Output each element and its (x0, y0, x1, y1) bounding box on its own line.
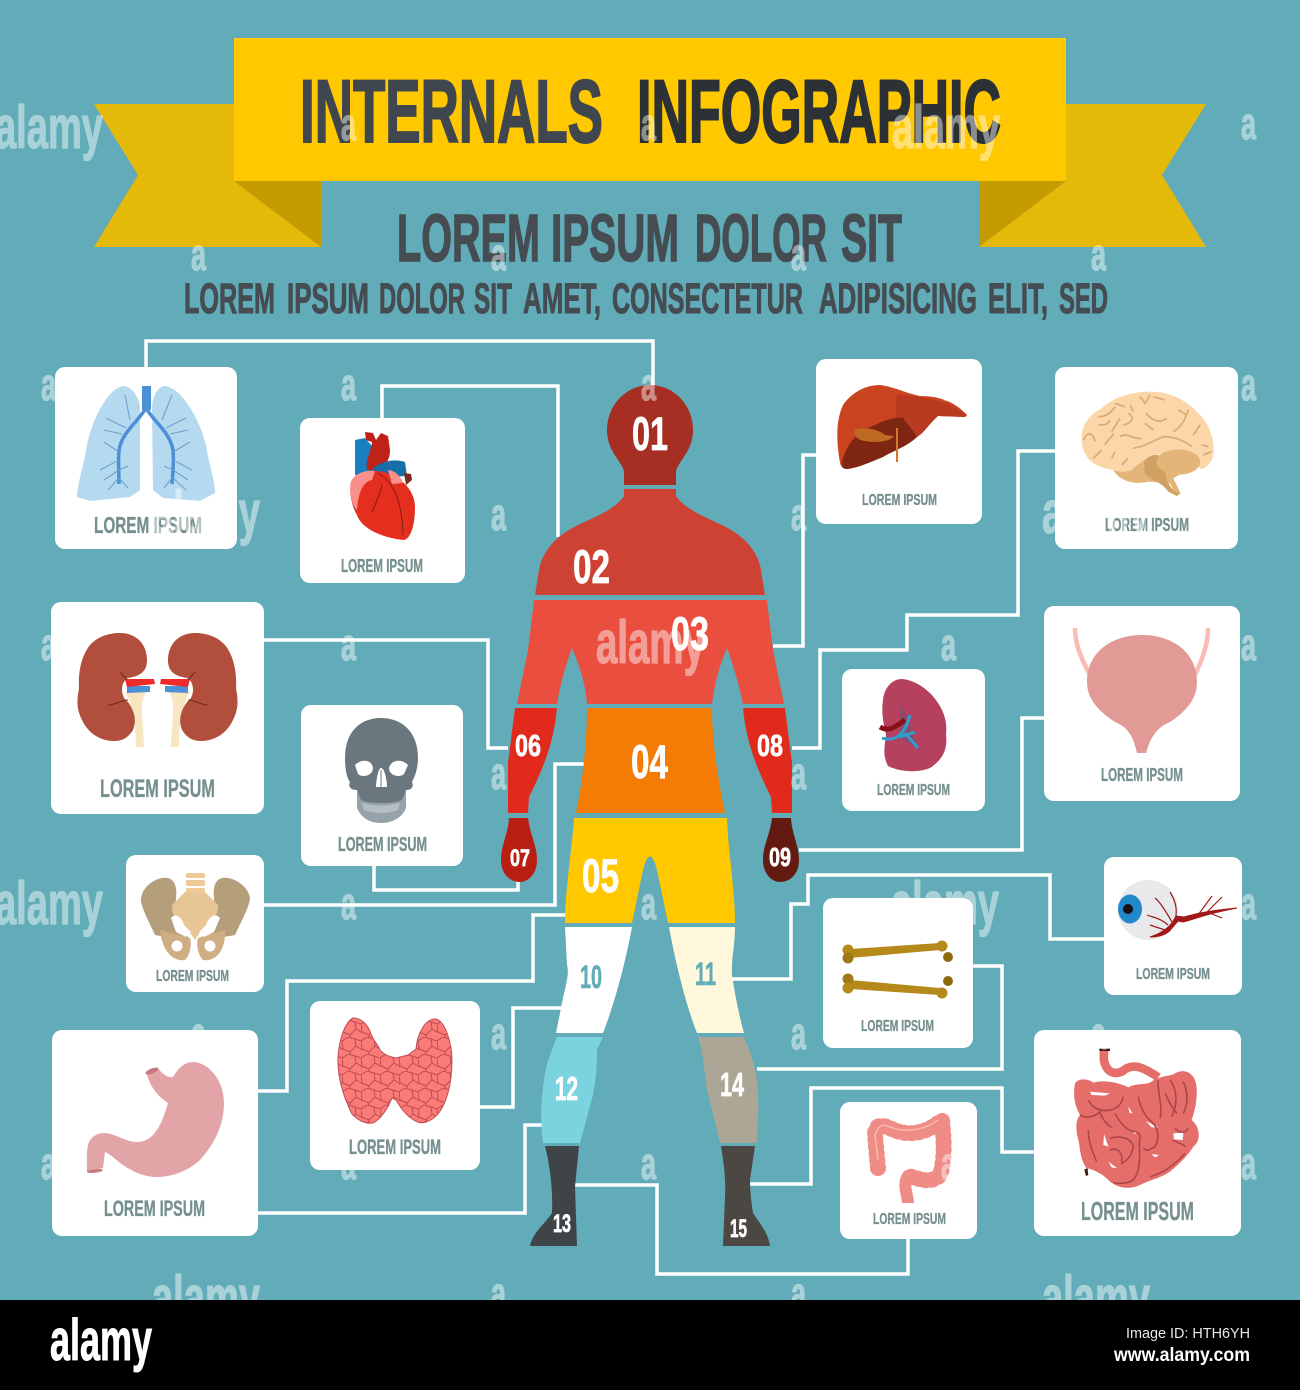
body 06 left forearm (508, 708, 557, 813)
watermarks: alamy (0, 94, 103, 161)
label: LOREM IPSUM (94, 512, 202, 538)
heading: LOREM (397, 201, 540, 276)
watermarks: a (641, 359, 657, 410)
watermarks: alamy (152, 479, 260, 546)
watermarks: a (341, 619, 357, 670)
subheading: LOREM (184, 275, 275, 323)
panel: eye (1104, 857, 1242, 995)
watermarks: a (191, 229, 207, 280)
watermarks: a (1241, 359, 1257, 410)
body 13 left foot (530, 1146, 579, 1246)
subheading: ADIPISICING (819, 275, 977, 323)
body 11 right thigh: 11 (695, 956, 716, 992)
watermarks: a (791, 1008, 807, 1059)
subheading: SED (1059, 275, 1108, 323)
label: LOREM IPSUM (1081, 1196, 1194, 1226)
watermarks: a (1091, 229, 1107, 280)
body 08 right forearm: 08 (757, 728, 783, 763)
body 07 left hand (501, 818, 537, 882)
watermarks: a (641, 878, 657, 929)
body 10 left thigh (556, 927, 632, 1033)
body 05 hips: 05 (582, 849, 619, 902)
watermarks: a (1241, 619, 1257, 670)
watermarks: a (491, 748, 507, 799)
subheading: IPSUM (287, 275, 369, 323)
body 13 left foot: 13 (553, 1210, 571, 1238)
title: INTERNALS (300, 61, 603, 161)
watermarks: a (941, 619, 957, 670)
body 12 left calf: 12 (555, 1070, 578, 1107)
body 02 shoulders: 02 (573, 540, 610, 593)
panel: lungs (55, 367, 237, 549)
watermarks: a (641, 1138, 657, 1189)
label: LOREM IPSUM (877, 782, 950, 799)
subheading: CONSECTETUR (612, 275, 803, 323)
icon: colon (875, 1120, 944, 1203)
footer logo: alamy (50, 1308, 152, 1373)
panel: kidneys (51, 602, 264, 814)
watermarks: alamy (891, 870, 999, 937)
subheading: ELIT, (988, 275, 1048, 323)
icon: heart (350, 432, 415, 540)
website: www.alamy.com (1113, 1345, 1250, 1366)
image id: Image ID: HTH6YH (1126, 1325, 1250, 1342)
heading: SIT (841, 201, 902, 276)
body 14 right calf (698, 1037, 758, 1143)
panel: heart (300, 418, 465, 583)
icon: brain (1082, 392, 1214, 496)
panel: intestine (1034, 1030, 1241, 1236)
title ribbon (94, 38, 1206, 247)
body 10 left thigh: 10 (580, 959, 602, 995)
watermarks: alamy (1042, 1264, 1150, 1331)
watermarks: a (41, 619, 57, 670)
label: LOREM IPSUM (156, 968, 229, 985)
body 09 right hand (763, 818, 799, 882)
body 01 head: 01 (632, 407, 668, 460)
watermarks: a (1091, 1008, 1107, 1059)
watermarks: a (791, 748, 807, 799)
watermarks: a (1241, 1138, 1257, 1189)
watermarks: a (341, 99, 357, 150)
panel: colon (840, 1102, 977, 1239)
heading: DOLOR (695, 201, 827, 276)
label: LOREM IPSUM (873, 1211, 946, 1228)
icon: lungs (77, 386, 215, 501)
watermarks: a (641, 99, 657, 150)
body 04 abdomen (576, 708, 725, 813)
label: LOREM IPSUM (861, 1018, 934, 1035)
watermarks: alamy (0, 870, 103, 937)
label: LOREM IPSUM (341, 556, 423, 576)
subheading (184, 275, 1108, 323)
body 03 chest (517, 600, 784, 704)
body 07 left hand: 07 (510, 845, 530, 872)
label: LOREM IPSUM (100, 775, 215, 803)
watermarks: a (341, 1138, 357, 1189)
icon: bladder (1075, 628, 1208, 753)
panel: skull (301, 705, 463, 866)
label: LOREM IPSUM (349, 1136, 441, 1159)
human body figure (501, 385, 799, 1246)
watermarks: a (791, 229, 807, 280)
watermarks: a (791, 1268, 807, 1319)
body 05 hips (565, 818, 735, 923)
icon: bones (842, 940, 953, 998)
label: LOREM IPSUM (1101, 765, 1183, 785)
body 03 chest: 03 (671, 607, 709, 660)
subheading: AMET, (523, 275, 601, 323)
panel: spleen (842, 669, 985, 811)
panel: thyroid (310, 1001, 480, 1170)
panel: pelvis (126, 855, 264, 992)
icon: skull (345, 718, 418, 823)
icon: eye (1118, 880, 1237, 940)
watermarks: a (941, 359, 957, 410)
body 06 left forearm: 06 (515, 728, 541, 763)
watermarks: a (1241, 878, 1257, 929)
watermarks: a (491, 489, 507, 540)
label: LOREM IPSUM (1136, 966, 1210, 983)
heading: IPSUM (551, 201, 679, 276)
body 14 right calf: 14 (720, 1066, 744, 1103)
body 04 abdomen: 04 (631, 735, 668, 788)
label: LOREM IPSUM (862, 492, 937, 509)
icon: liver (837, 385, 967, 469)
watermarks: alamy (1042, 479, 1150, 546)
watermarks: a (1241, 98, 1257, 149)
panel: stomach (52, 1030, 258, 1236)
watermarks: a (341, 878, 357, 929)
panel: bones (823, 898, 973, 1048)
icon: spleen (880, 679, 946, 771)
watermarks: a (491, 1268, 507, 1319)
icon: stomach (87, 1062, 224, 1177)
subheading: SIT (474, 275, 512, 323)
body 15 right foot: 15 (730, 1215, 747, 1243)
watermarks: a (791, 489, 807, 540)
label: LOREM IPSUM (104, 1196, 205, 1221)
body 02 shoulders (535, 489, 765, 595)
footer bar (0, 1300, 1300, 1390)
watermarks: a (191, 1008, 207, 1059)
body 15 right foot (721, 1146, 770, 1246)
watermarks: a (41, 1138, 57, 1189)
watermarks: a (341, 359, 357, 410)
body 09 right hand: 09 (769, 842, 791, 872)
label: LOREM IPSUM (338, 834, 427, 856)
title: INFOGRAPHIC (637, 61, 1001, 161)
watermarks: a (941, 1138, 957, 1189)
watermarks: a (41, 359, 57, 410)
icon: thyroid (338, 1018, 452, 1123)
panel: liver (816, 359, 982, 524)
watermarks: a (491, 229, 507, 280)
body 01 head (607, 385, 693, 485)
panel: brain (1055, 367, 1238, 549)
heading (397, 201, 902, 276)
panel: bladder (1044, 606, 1240, 801)
watermarks: alamy (152, 1264, 260, 1331)
icon: kidneys (77, 633, 238, 747)
label: LOREM IPSUM (1105, 515, 1189, 535)
watermarks: alamy (596, 609, 705, 676)
body 11 right thigh (669, 927, 744, 1033)
watermarks: a (491, 1008, 507, 1059)
subheading: DOLOR (379, 275, 465, 323)
connector lines (146, 341, 1104, 1274)
icon: pelvis (141, 873, 250, 960)
icon: intestine (1074, 1049, 1199, 1188)
watermarks: alamy (892, 94, 1000, 161)
body 12 left calf (541, 1037, 603, 1143)
body 08 right forearm (743, 708, 792, 813)
